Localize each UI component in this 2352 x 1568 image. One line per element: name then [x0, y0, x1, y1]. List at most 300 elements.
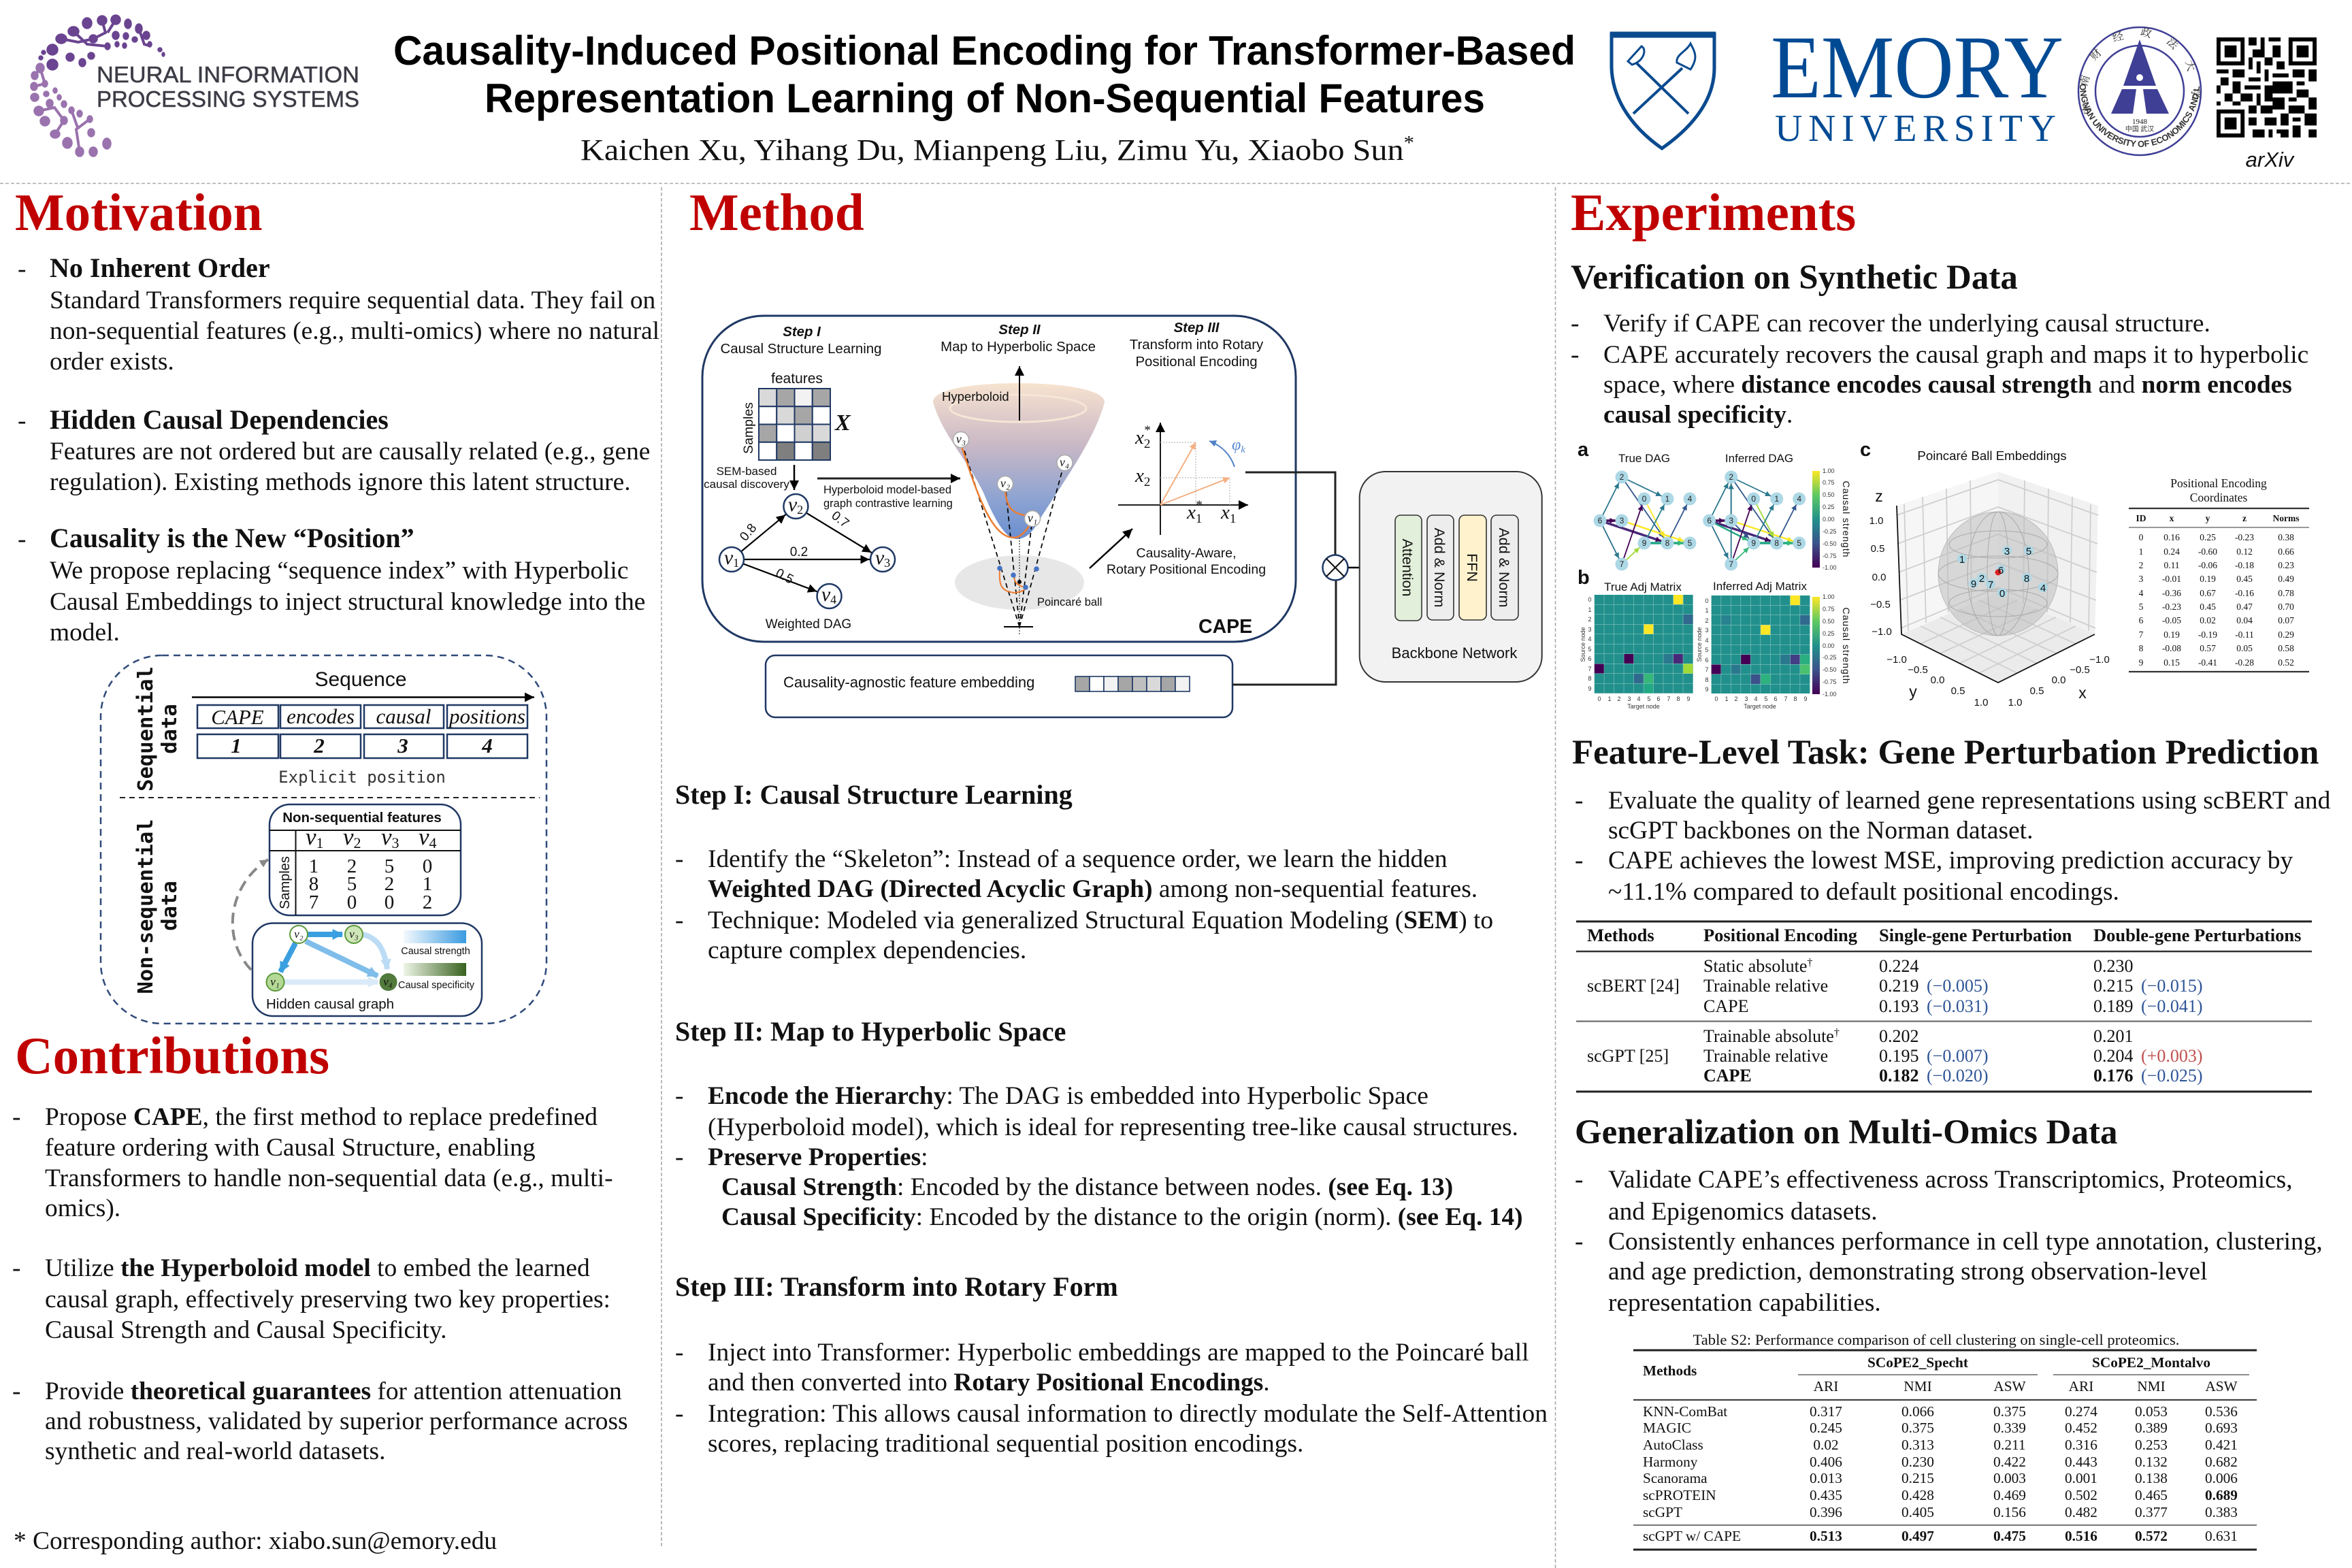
table: gene perturbation results: scGPT [25] — [1587, 1046, 1669, 1066]
item: No Inherent Order: order exists. — [50, 348, 174, 376]
table: positional encoding coordinates: 4 — [2139, 588, 2144, 598]
figure a: True and inferred DAG: 8 — [1665, 538, 1670, 548]
step captions — [721, 321, 1264, 370]
figure a: True and inferred DAG: 5 — [1688, 538, 1693, 548]
heatmap ticks: 0 — [1588, 596, 1592, 603]
table S2: cell clustering: 0.469 — [1993, 1487, 2026, 1503]
contribution: theoretical guarantees: and robustness, validated by superior performance across — [45, 1407, 628, 1435]
step captions: Positional Encoding — [1135, 355, 1258, 370]
table S2: cell clustering: NMI — [1904, 1378, 1932, 1394]
feature matrix X: X — [834, 410, 851, 436]
title — [393, 28, 1575, 121]
colorbar b: -1.00 — [1823, 691, 1837, 698]
rotary encoding plot: x — [1187, 502, 1196, 523]
heatmap ticks: 3 — [1744, 696, 1748, 702]
table: gene perturbation results — [1576, 921, 2312, 1092]
item: Causality is the New Position: - — [18, 525, 26, 553]
weighted DAG: 0.7 — [829, 508, 851, 531]
multi-omics text: - — [1575, 1166, 1583, 1194]
table S2: cell clustering: 0.389 — [2135, 1420, 2168, 1436]
table: gene perturbation results: CAPE — [1703, 996, 1748, 1016]
table S2: cell clustering: 0.316 — [2065, 1437, 2097, 1453]
table: non-sequential features: 1 — [309, 855, 318, 877]
table: positional encoding coordinates: 9 — [2139, 657, 2144, 668]
table S2: cell clustering: Table S2: Performance comparison of cell clustering on single-cell proteomics. — [1693, 1331, 2179, 1348]
rotary encoding plot: * — [1196, 498, 1203, 512]
table: positional encoding coordinates: ID — [2136, 513, 2146, 523]
table: non-sequential features: Non-sequential features — [282, 810, 442, 826]
connectors to backbone — [1232, 472, 1336, 685]
feature embedding box: Causality-agnostic feature embedding — [783, 674, 1034, 691]
inferred DAG — [1703, 471, 1806, 570]
table: non-sequential features: 0 — [347, 892, 357, 913]
weighted DAG: 1 — [733, 556, 739, 570]
table: positional encoding coordinates: 0.58 — [2278, 643, 2294, 653]
arrow: to attention — [1348, 567, 1390, 568]
sequence tokens and positions: positions — [448, 704, 525, 728]
hidden causal graph: Causal specificity — [398, 980, 475, 991]
table S2: cell clustering: 0.406 — [1810, 1454, 1842, 1470]
colorbar b: 0.25 — [1823, 630, 1835, 637]
item: Hidden Causal Dependencies — [18, 404, 650, 496]
table S2: cell clustering: 0.465 — [2135, 1487, 2168, 1503]
table: positional encoding coordinates: -0.05 — [2162, 615, 2181, 625]
true adjacency heatmap — [1595, 595, 1693, 693]
Step II text: Causal Specificity: Encoded by the distance to the origin (norm). (see Eq. 14) — [721, 1203, 1523, 1231]
colorbar a: -0.50 — [1823, 540, 1837, 547]
Step I text: - — [675, 845, 683, 873]
figure a: True and inferred DAG: 0 — [1642, 494, 1647, 504]
heatmap ticks: 1 — [1607, 696, 1612, 702]
backbone network — [1360, 472, 1542, 682]
table: non-sequential features: v — [343, 823, 354, 850]
table: gene perturbation results: Double-gene Perturbations — [2093, 925, 2301, 945]
diagram: sequential vs non-sequential data — [101, 655, 546, 1024]
panel: Experiments — [1571, 183, 2331, 1550]
heatmap ticks: 8 — [1705, 676, 1709, 683]
weighted DAG: v — [821, 583, 830, 606]
3D axes panes — [1897, 472, 2098, 683]
arrow: graph contrastive learning: graph contrastive learning — [823, 497, 953, 510]
figure a: True and inferred DAG: Inferred DAG — [1725, 452, 1793, 465]
heatmap ticks: 7 — [1705, 666, 1709, 673]
heatmap ticks: 4 — [1705, 637, 1709, 644]
table: non-sequential features: 4 — [429, 834, 437, 851]
hidden causal graph: Hidden causal graph — [266, 996, 394, 1012]
table S2: cell clustering: 0.428 — [1901, 1487, 1934, 1503]
table S2: cell clustering: 0.211 — [1993, 1437, 2026, 1453]
table: positional encoding coordinates: 0.38 — [2278, 532, 2294, 542]
rotary encoding plot: x — [1221, 502, 1230, 523]
table: non-sequential features: 2 — [354, 834, 361, 851]
contribution: CAPE: feature ordering with Causal Structure, enabling — [45, 1134, 536, 1162]
heading: Motivation: Motivation — [15, 183, 263, 242]
inferred DAG: 8 — [1774, 538, 1779, 548]
table: non-sequential features: 2 — [347, 855, 357, 877]
sequence arrow: Sequence — [314, 668, 407, 691]
table: positional encoding coordinates: -0.23 — [2235, 532, 2254, 542]
contribution: theoretical guarantees: synthetic and real-world datasets. — [45, 1437, 385, 1465]
table: positional encoding coordinates: 0.19 — [2200, 574, 2216, 584]
feature embedding box — [766, 655, 1232, 717]
Step II text: - — [675, 1143, 683, 1171]
heatmap ticks: 5 — [1647, 696, 1651, 702]
item: No Inherent Order: No Inherent Order — [50, 252, 270, 283]
feature matrix X: features — [771, 371, 823, 387]
Step III text: Inject into Transformer: Hyperbolic embeddings are mapped to the Poincaré ball — [708, 1339, 1529, 1367]
gene perturbation text — [1575, 787, 2331, 906]
colorbar a: -0.25 — [1823, 528, 1837, 535]
table S2: cell clustering: NMI — [2137, 1378, 2166, 1394]
table S2: cell clustering: Harmony — [1643, 1454, 1698, 1470]
table: gene perturbation results: Static absolute — [1703, 956, 1807, 976]
multi-omics text: and Epigenomics datasets. — [1608, 1198, 1878, 1226]
table: positional encoding coordinates: 0.29 — [2278, 630, 2294, 640]
heatmap ticks: Source node — [1696, 627, 1703, 662]
Step III text: - — [675, 1339, 683, 1367]
table: non-sequential features: 1 — [423, 873, 432, 895]
embedded points: 8 — [2024, 573, 2029, 585]
colorbar a: -1.00 — [1823, 564, 1837, 571]
sequence tokens and positions: 3 — [397, 734, 408, 757]
hidden causal graph — [252, 923, 482, 1016]
table: positional encoding coordinates: -0.11 — [2235, 630, 2254, 640]
label: Non-sequential data: Non-sequential — [134, 819, 158, 994]
hidden causal graph: v₁ — [270, 975, 280, 988]
table: gene perturbation results: 0.204 (+0.003) — [2093, 1046, 2202, 1066]
inferred DAG: 6 — [1707, 516, 1712, 525]
table S2: cell clustering: 0.631 — [2205, 1528, 2238, 1544]
table S2: cell clustering: 0.313 — [1901, 1437, 1934, 1453]
heatmap ticks: 9 — [1588, 685, 1592, 692]
Step II text: Preserve Properties: — [708, 1143, 928, 1171]
table: positional encoding coordinates: -0.41 — [2198, 657, 2217, 668]
heatmap ticks: 6 — [1774, 696, 1778, 702]
table S2: cell clustering: 0.215 — [1901, 1470, 1934, 1486]
axis tick labels: 0.5 — [1951, 685, 1965, 697]
figure a: True and inferred DAG: 7 — [1620, 559, 1624, 569]
item: Hidden Causal Dependencies: Features are not ordered but are causally related (e.g., gene — [50, 438, 650, 466]
colorbar a: 1.00 — [1823, 468, 1835, 474]
table: non-sequential features — [270, 804, 461, 915]
heading: Method: Method — [689, 183, 864, 242]
item: Causality is the New Position: Causality is the New “Position” — [50, 523, 414, 553]
step captions: Map to Hyperbolic Space — [941, 340, 1096, 355]
weighted DAG: v — [788, 493, 797, 516]
label: Non-sequential data — [134, 819, 182, 994]
axis tick labels: 1.0 — [1974, 697, 1988, 708]
table S2: cell clustering — [1633, 1331, 2257, 1550]
step captions: Step III — [1174, 321, 1220, 336]
heading: Contributions: Contributions — [15, 1026, 329, 1085]
heatmap ticks: 2 — [1705, 617, 1709, 624]
heatmap ticks: Target node — [1744, 703, 1776, 710]
contribution: Hyperboloid model — [12, 1254, 610, 1344]
table S2: cell clustering: 0.516 — [2065, 1528, 2097, 1544]
embedded points: 5 — [2026, 546, 2031, 557]
table S2: cell clustering: 0.230 — [1901, 1454, 1934, 1470]
table: positional encoding coordinates: 0.04 — [2236, 615, 2253, 625]
weighted DAG: 3 — [884, 556, 890, 570]
multiply symbol — [1323, 555, 1348, 580]
table: positional encoding coordinates: 0.11 — [2163, 560, 2180, 570]
logo: university seal — [2077, 26, 2202, 157]
table: gene perturbation results: 0.215 (−0.015) — [2093, 976, 2202, 996]
Step II text — [675, 1016, 1523, 1231]
heatmap ticks: 0 — [1705, 598, 1709, 604]
arrow: dashed graph to table — [233, 860, 268, 970]
axis tick labels: −1.0 — [1872, 626, 1892, 638]
table: positional encoding coordinates: -0.06 — [2198, 560, 2217, 570]
table: gene perturbation results: 0.201 — [2093, 1026, 2133, 1046]
table: positional encoding coordinates: 0.05 — [2236, 643, 2253, 653]
colorbar b — [1812, 593, 1852, 698]
Step III text: and then converted into Rotary Positional Encodings. — [708, 1369, 1270, 1396]
table: gene perturbation results: 0.195 (−0.007) — [1879, 1046, 1988, 1066]
colorbar a: 0.75 — [1823, 479, 1835, 486]
table: positional encoding coordinates: y — [2206, 513, 2210, 523]
inferred DAG: 5 — [1797, 538, 1801, 548]
heatmap ticks: 1 — [1588, 606, 1592, 613]
table: non-sequential features: 7 — [309, 892, 318, 913]
table S2: cell clustering: 0.339 — [1993, 1420, 2026, 1436]
verification text: - — [1571, 341, 1579, 369]
table S2: cell clustering: AutoClass — [1643, 1437, 1703, 1453]
verification text: space, where distance encodes causal strength and norm encodes — [1603, 371, 2292, 399]
table: positional encoding coordinates: z — [2242, 513, 2247, 523]
step captions: Causal Structure Learning — [721, 342, 881, 357]
heatmap ticks: 6 — [1705, 657, 1709, 664]
table: positional encoding coordinates: 7 — [2139, 630, 2144, 640]
heatmap ticks: 5 — [1705, 647, 1709, 653]
table: gene perturbation results: Trainable relative — [1703, 1046, 1828, 1066]
rotary encoding plot: φ — [1232, 436, 1241, 454]
table S2: cell clustering: Methods — [1643, 1362, 1697, 1379]
table: positional encoding coordinates: 0.23 — [2278, 560, 2294, 570]
multi-omics text: Validate CAPE’s effectiveness across Transcriptomics, Proteomics, — [1608, 1166, 2293, 1194]
Step II text: Encode the Hierarchy: The DAG is embedded into Hyperbolic Space — [708, 1082, 1428, 1110]
rotary encoding plot: 1 — [1196, 512, 1202, 526]
colorbar a — [1812, 468, 1852, 571]
axis tick labels: z — [1875, 487, 1883, 505]
table S2: cell clustering: 0.377 — [2135, 1504, 2168, 1520]
weighted DAG: 0.2 — [790, 545, 808, 559]
table: non-sequential features: 3 — [392, 834, 399, 851]
table S2: cell clustering: 0.003 — [1993, 1470, 2026, 1486]
item: Causality is the New Position — [18, 523, 645, 647]
table S2: cell clustering: 0.405 — [1901, 1504, 1934, 1520]
colorbar b: -0.50 — [1823, 666, 1837, 673]
Step III text: Step III: Transform into Rotary Form — [675, 1271, 1118, 1302]
multi-omics text: - — [1575, 1228, 1583, 1256]
figure c: Poincare ball embeddings: Poincaré Ball Embeddings — [1917, 448, 2067, 463]
heatmap ticks — [1580, 596, 1808, 710]
heatmap ticks: 3 — [1588, 626, 1592, 633]
contribution: Hyperboloid model: Causal Strength and Causal Specificity. — [45, 1316, 447, 1344]
table: non-sequential features: v — [306, 823, 316, 850]
table: gene perturbation results: Trainable absolute — [1703, 1026, 1834, 1046]
table: positional encoding coordinates: 0.49 — [2278, 574, 2294, 584]
hyperboloid and Poincare ball — [933, 366, 1105, 635]
hyperboloid and Poincare ball: Poincaré ball — [1037, 596, 1102, 608]
table S2: cell clustering: KNN-ComBat — [1643, 1403, 1727, 1420]
weighted DAG: Weighted DAG — [766, 617, 851, 632]
sphere — [1938, 512, 2058, 636]
embedded points — [1957, 546, 2048, 600]
axis tick labels: −0.5 — [2070, 664, 2090, 676]
verification text: - — [1571, 310, 1579, 338]
embedded points: 9 — [1971, 578, 1976, 590]
hidden causal graph: v₄ — [383, 975, 393, 988]
table: non-sequential features: 2 — [423, 892, 432, 913]
weighted DAG — [719, 493, 895, 632]
table: non-sequential features: 8 — [309, 873, 318, 895]
table: positional encoding coordinates: Coordinates — [2190, 491, 2247, 504]
figure a: True and inferred DAG: a — [1578, 439, 1589, 461]
heatmap ticks: 5 — [1764, 696, 1768, 702]
figure a: True and inferred DAG — [1578, 439, 1852, 571]
table S2: cell clustering: 0.572 — [2135, 1528, 2168, 1544]
sequence tokens and positions: 1 — [231, 734, 242, 757]
table S2: cell clustering: 0.317 — [1810, 1403, 1842, 1420]
table: positional encoding coordinates: 0.25 — [2200, 532, 2216, 542]
table: gene perturbation results: Single-gene Perturbation — [1879, 925, 2072, 945]
figure b: adjacency matrices — [1578, 567, 1852, 710]
hyperboloid and Poincare ball: v₁ — [1028, 511, 1037, 525]
table S2: cell clustering: 0.435 — [1810, 1487, 1842, 1503]
figure c: Poincare ball embeddings: c — [1860, 439, 1871, 461]
heatmap ticks: 6 — [1588, 655, 1592, 662]
inferred DAG: 2 — [1729, 472, 1733, 482]
inferred DAG: 7 — [1729, 559, 1733, 569]
table: gene perturbation results: Trainable relative — [1703, 976, 1828, 996]
table: positional encoding coordinates: x — [2170, 513, 2174, 523]
step captions: Transform into Rotary — [1130, 338, 1264, 353]
arrow: graph contrastive learning — [817, 478, 960, 510]
colorbar a: 0.50 — [1823, 491, 1835, 498]
contribution: CAPE: Propose CAPE, the first method to replace predefined — [45, 1103, 598, 1131]
inferred DAG: 0 — [1751, 494, 1756, 504]
table: positional encoding coordinates: 0.67 — [2200, 588, 2216, 598]
item: Hidden Causal Dependencies: - — [18, 407, 26, 435]
table S2: cell clustering: 0.132 — [2135, 1454, 2168, 1470]
axis tick labels — [1869, 487, 2110, 708]
figure c: Poincare ball embeddings — [1860, 439, 2110, 708]
Step III text — [675, 1271, 1548, 1458]
weighted DAG: 4 — [830, 593, 836, 606]
table: non-sequential features: 5 — [347, 873, 357, 895]
arXiv label: arXiv — [2246, 148, 2295, 172]
heatmap ticks: Source node — [1580, 627, 1586, 662]
table S2: cell clustering: Scanorama — [1643, 1470, 1708, 1486]
table: positional encoding coordinates: 8 — [2139, 643, 2144, 653]
axis tick labels: 0.0 — [2052, 674, 2065, 686]
table: positional encoding coordinates: -0.28 — [2235, 657, 2254, 668]
backbone network: FFN — [1464, 553, 1480, 582]
table: gene perturbation results: 0.202 — [1879, 1026, 1919, 1046]
arrow: SEM-based causal discovery: causal discovery — [704, 478, 789, 491]
table S2: cell clustering: 0.383 — [2205, 1504, 2238, 1520]
table: positional encoding coordinates: 0.12 — [2236, 546, 2253, 557]
colorbar a: 0.25 — [1823, 504, 1835, 510]
logo: university seal: 1948 — [2132, 118, 2148, 126]
QR code — [2217, 37, 2317, 137]
table: non-sequential features: v — [419, 823, 429, 850]
table: positional encoding coordinates: -0.19 — [2198, 630, 2217, 640]
subheading: Gene Perturbation: Feature-Level Task: Gene Perturbation Prediction — [1572, 734, 2319, 772]
item: No Inherent Order: - — [18, 255, 26, 283]
item: Causality is the New Position: Causal Embeddings to inject structural knowledge into the — [50, 588, 645, 616]
table: gene perturbation results: CAPE — [1703, 1066, 1752, 1085]
verification text: causal specificity. — [1603, 401, 1793, 429]
table S2: cell clustering: 0.253 — [2135, 1437, 2168, 1453]
item: Hidden Causal Dependencies: regulation). Existing methods ignore this latent structure. — [50, 468, 631, 496]
table: positional encoding coordinates — [2129, 476, 2309, 672]
heatmap ticks: 4 — [1754, 696, 1758, 702]
Step II text: - — [675, 1082, 683, 1110]
table S2: cell clustering: 0.422 — [1993, 1454, 2026, 1470]
label: Sequential data: data — [158, 704, 182, 754]
label: Sequential data: Sequential — [134, 666, 158, 791]
table S2: cell clustering: 0.245 — [1810, 1420, 1842, 1436]
colorbar a: 0.00 — [1823, 516, 1835, 523]
table: positional encoding coordinates: -0.01 — [2162, 574, 2181, 584]
gene perturbation text: scGPT backbones on the Norman dataset. — [1608, 817, 2033, 845]
inferred DAG: 1 — [1774, 494, 1779, 504]
heatmap ticks: 3 — [1705, 627, 1709, 634]
table: positional encoding coordinates: 1 — [2139, 546, 2143, 557]
heatmap ticks: 7 — [1667, 696, 1671, 702]
weighted DAG: v — [724, 546, 733, 569]
heatmap ticks: 6 — [1656, 696, 1661, 702]
label: CAPE: CAPE — [1198, 616, 1252, 638]
sequence tokens and positions: 2 — [313, 734, 325, 757]
table: gene perturbation results: 0.189 (−0.041) — [2093, 996, 2202, 1016]
weighted DAG: v — [875, 546, 884, 569]
colorbar b: -0.75 — [1823, 679, 1837, 685]
item: Causality is the New Position: We propose replacing “sequence index” with Hyperbolic — [50, 557, 628, 585]
table: positional encoding coordinates: 0.16 — [2163, 532, 2180, 542]
table: positional encoding coordinates: 0.19 — [2163, 630, 2180, 640]
figure b: adjacency matrices: True Adj Matrix — [1604, 581, 1682, 593]
table S2: cell clustering: ARI — [1814, 1378, 1838, 1394]
axis tick labels: −0.5 — [1870, 599, 1891, 610]
contribution: CAPE: Transformers to handle non-sequential data (e.g., multi- — [45, 1164, 613, 1192]
hyperboloid and Poincare ball: Hyperboloid — [942, 389, 1009, 404]
logo: university seal: 中南财经政法大学 — [2079, 27, 2201, 114]
true DAG edges — [1600, 477, 1690, 564]
table S2: cell clustering: 0.443 — [2065, 1454, 2097, 1470]
table S2: cell clustering: 0.502 — [2065, 1487, 2097, 1503]
logo wordmark: NEURAL INFORMATION — [97, 62, 359, 87]
sequence tokens and positions — [197, 704, 527, 758]
item: No Inherent Order: Standard Transformers require sequential data. They fail on — [50, 287, 656, 314]
embedded points: 4 — [2040, 583, 2046, 594]
table: positional encoding coordinates: -0.60 — [2198, 546, 2217, 557]
table S2: cell clustering: 0.689 — [2205, 1487, 2238, 1503]
true DAG nodes — [1594, 471, 1696, 570]
weighted DAG: 0.8 — [737, 521, 760, 544]
sequence tokens and positions: CAPE — [211, 705, 264, 729]
rotary encoding plot: 1 — [1230, 512, 1236, 526]
table: positional encoding coordinates: 0 — [2139, 532, 2144, 542]
table S2: cell clustering: 0.475 — [1993, 1528, 2026, 1544]
contribution: theoretical guarantees: - — [12, 1377, 20, 1405]
figure: CAPE architecture — [702, 316, 1542, 717]
logo: NeurIPS — [31, 15, 359, 157]
table: positional encoding coordinates: 0.45 — [2200, 602, 2216, 612]
sequence tokens and positions: encodes — [287, 704, 355, 728]
